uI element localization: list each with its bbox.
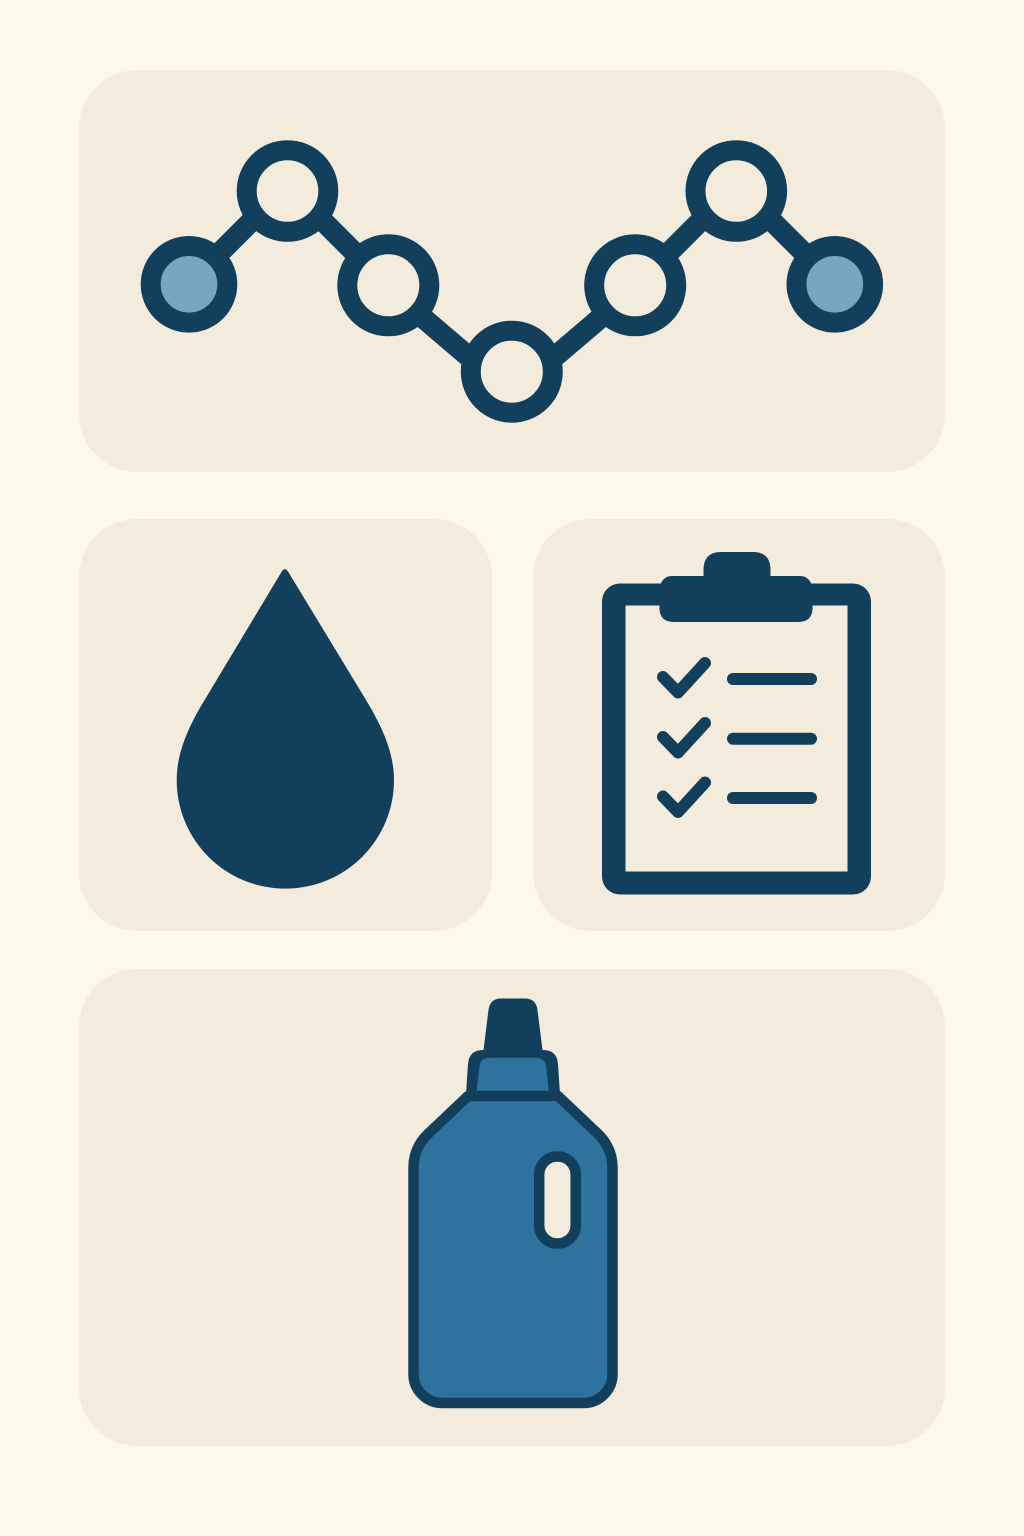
icon: bottle — [414, 998, 612, 1403]
bottle body — [414, 1096, 612, 1403]
panel: detergent bottle — [79, 969, 945, 1446]
icon: water drop — [177, 569, 394, 889]
checklist row 3 — [663, 782, 811, 812]
bottle cap — [483, 998, 543, 1054]
panel: molecule chain — [79, 70, 945, 472]
checklist row 2 — [663, 723, 811, 752]
bottle handle — [539, 1156, 576, 1244]
clipboard clip — [660, 552, 812, 622]
icon: molecule chain — [151, 150, 873, 413]
bottle neck — [466, 1050, 560, 1094]
icon: clipboard — [602, 552, 871, 894]
checklist row 1 — [663, 663, 811, 692]
panel: water drop — [79, 519, 492, 931]
panel: checklist — [533, 519, 945, 931]
